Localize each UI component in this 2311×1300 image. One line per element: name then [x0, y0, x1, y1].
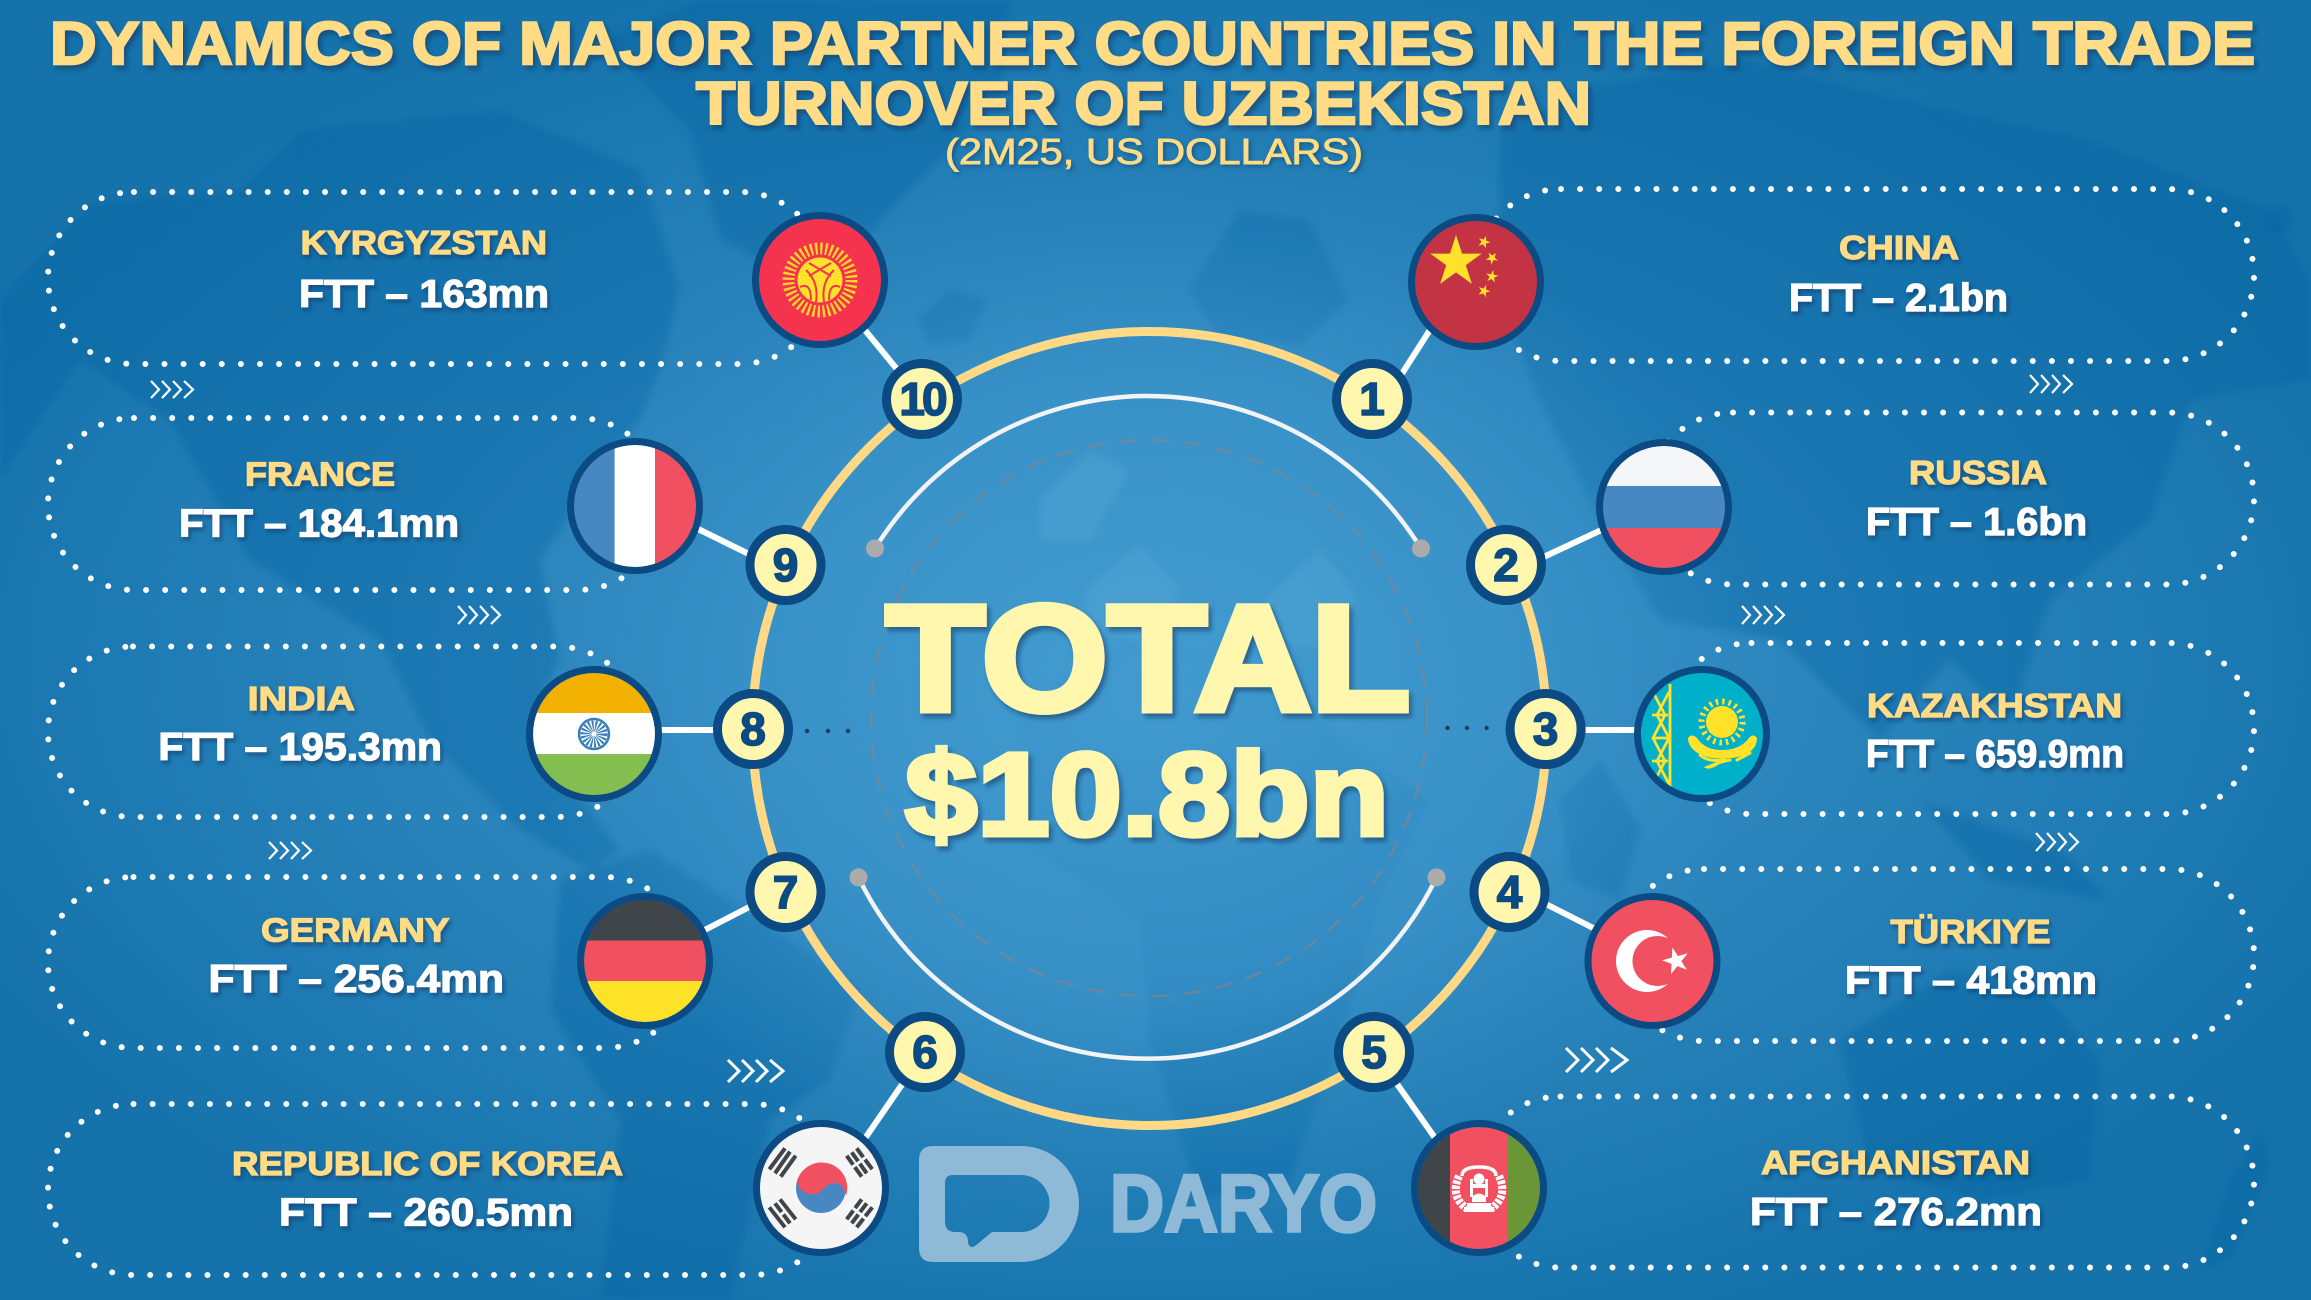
partner 6: Republic of Korea: FTT – 260.5mn	[279, 1192, 573, 1234]
partner 4: Türkiye	[1474, 856, 2254, 1041]
central glow	[500, 150, 1800, 1230]
logo: Daryo: DARYO	[1110, 1159, 1377, 1249]
partner 2: Russia: 2	[1493, 539, 1519, 591]
total value: $10.8bn	[905, 729, 1389, 861]
partner 5: Afghanistan: AFGHANISTAN	[1761, 1144, 2030, 1181]
chevron arrows left 4	[728, 1060, 783, 1082]
partner 2: Russia	[1470, 412, 2254, 600]
chevron arrows right 3	[2036, 833, 2078, 851]
total value: TOTAL	[886, 574, 1410, 742]
partner 1: China	[1336, 189, 2254, 434]
partner 6: Republic of Korea: 6	[912, 1026, 938, 1078]
partner 2: Russia: FTT – 1.6bn	[1866, 501, 2087, 544]
partner 7: Germany: GERMANY	[261, 912, 450, 949]
partner 4: Türkiye: FTT – 418mn	[1845, 960, 2097, 1002]
partner 2: Russia: RUSSIA	[1909, 454, 2047, 491]
partner 9: France: FTT – 184.1mn	[179, 502, 459, 546]
partner 10: Kyrgyzstan: FTT – 163mn	[299, 273, 549, 316]
small dots right	[1445, 726, 1489, 730]
chevron arrows right 2	[1742, 606, 1784, 624]
lower white arc	[850, 868, 1446, 1059]
partner 8: India: INDIA	[248, 680, 355, 717]
partner 4: Türkiye: TÜRKIYE	[1890, 913, 2050, 950]
partner 10: Kyrgyzstan: 10	[899, 373, 946, 425]
logo: Daryo	[919, 1146, 1377, 1262]
outer yellow ring	[752, 332, 1546, 1126]
partner 7: Germany: FTT – 256.4mn	[208, 958, 504, 1001]
partner 7: Germany	[48, 856, 821, 1048]
chevron arrows left 3	[269, 842, 311, 859]
partner 3: Kazakhstan: 3	[1533, 703, 1558, 755]
partner 5: Afghanistan: FTT – 276.2mn	[1750, 1191, 2042, 1234]
central dashed circle	[871, 440, 1427, 996]
partner 3: Kazakhstan: KAZAKHSTAN	[1867, 687, 2122, 724]
chevron arrows right 1	[2030, 375, 2072, 393]
partner 10: Kyrgyzstan: KYRGYZSTAN	[301, 224, 547, 261]
partner 1: China: CHINA	[1839, 229, 1959, 266]
partner 9: France	[48, 418, 821, 600]
partner 9: France: FRANCE	[245, 456, 395, 492]
partner 9: France: 9	[773, 539, 798, 591]
partner 6: Republic of Korea: REPUBLIC OF KOREA	[232, 1145, 623, 1182]
partner 8: India	[48, 646, 788, 817]
light land patches near the centre	[1040, 450, 1360, 650]
partner 3: Kazakhstan	[1510, 643, 2254, 814]
chevron arrows right 4	[1566, 1048, 1627, 1072]
title: TURNOVER OF UZBEKISTAN	[696, 70, 1591, 137]
partner 4: Türkiye: 4	[1497, 866, 1523, 918]
upper white arc	[866, 396, 1430, 558]
chevron arrows left 1	[151, 381, 193, 398]
partner 1: China: 1	[1359, 373, 1385, 425]
partner 7: Germany: 7	[773, 866, 798, 918]
partner 1: China: FTT – 2.1bn	[1789, 277, 2008, 320]
title: DYNAMICS OF MAJOR PARTNER COUNTRIES IN THE FOREIGN TRADE	[50, 10, 2255, 77]
partner 8: India: 8	[740, 703, 766, 755]
partner 6: Republic of Korea	[48, 1016, 960, 1275]
subtitle: (2M25, US DOLLARS)	[945, 131, 1363, 172]
partner 3: Kazakhstan: FTT – 659.9mn	[1866, 733, 2124, 776]
small dots left	[805, 729, 850, 733]
partner 5: Afghanistan	[1338, 1016, 2254, 1268]
title	[50, 10, 2255, 137]
total value	[886, 574, 1410, 861]
partner 5: Afghanistan: 5	[1361, 1026, 1387, 1078]
chevron arrows left 2	[458, 606, 500, 624]
partner 8: India: FTT – 195.3mn	[158, 726, 442, 769]
partner 10: Kyrgyzstan	[48, 192, 958, 434]
